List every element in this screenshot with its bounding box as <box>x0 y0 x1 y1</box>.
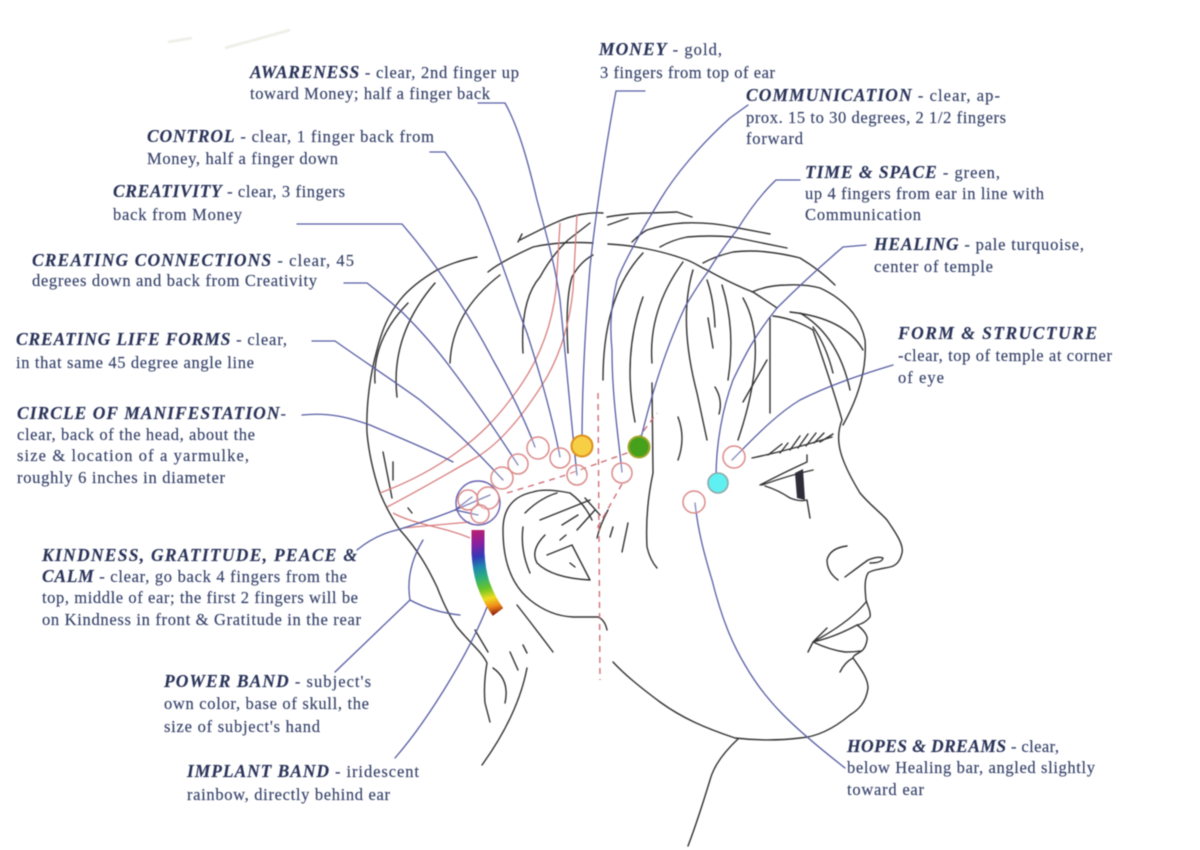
leader: implant band <box>395 607 487 758</box>
creating connections spot <box>508 454 528 474</box>
kindness and gratitude spots <box>458 490 478 510</box>
label: time and space: Communication <box>805 205 921 224</box>
label: control: Money, half a finger down <box>147 149 338 168</box>
label: power band: POWER BAND - subject's <box>163 671 371 691</box>
label: time and space: up 4 fingers from ear in line with <box>805 184 1045 203</box>
leader: form and structure <box>732 365 893 460</box>
label: circle of manifestation: size & location of a yarmulke, <box>17 446 249 465</box>
label: communication: prox. 15 to 30 degrees, 2 1/2 fingers <box>746 108 1006 127</box>
label: implant band: rainbow, directly behind ear <box>187 785 390 804</box>
label: control: CONTROL - clear, 1 finger back from <box>147 126 434 146</box>
leader: communication <box>611 105 748 472</box>
leader: money <box>582 91 645 443</box>
label: creativity: CREATIVITY - clear, 3 fingers <box>113 181 345 201</box>
leader: circle of manifestation <box>302 414 453 462</box>
nose and mouth <box>808 546 883 672</box>
leader: creativity <box>297 224 535 447</box>
hopes and dreams spot <box>683 491 705 513</box>
neck <box>688 739 738 846</box>
money gold spot <box>572 436 592 456</box>
label: money: MONEY - gold, <box>598 39 722 59</box>
label: circle of manifestation: roughly 6 inches in diameter <box>17 468 226 487</box>
leader: kindness <box>357 495 490 550</box>
label: hopes and dreams: HOPES & DREAMS - clear, <box>846 736 1059 756</box>
circle of manifestation <box>456 481 500 525</box>
label: kindness, gratitude, peace and calm: KINDNESS, GRATITUDE, PEACE & <box>41 545 357 565</box>
creating life forms spot <box>491 467 513 489</box>
head line drawing <box>367 212 902 846</box>
label: circle of manifestation <box>17 403 286 487</box>
label: form and structure: -clear, top of temple at corner <box>898 346 1112 365</box>
label: time and space: TIME & SPACE - green, <box>805 162 1000 182</box>
hair strands <box>375 212 865 568</box>
label: healing <box>873 234 1084 276</box>
label: power band: size of subject's hand <box>164 717 321 736</box>
leader: power band <box>335 540 460 672</box>
label: creating connections <box>32 250 354 290</box>
label: hopes and dreams: toward ear <box>847 780 924 799</box>
label: healing: center of temple <box>874 257 993 276</box>
label: time and space <box>805 162 1045 224</box>
label: implant band: IMPLANT BAND - iridescent <box>186 761 419 781</box>
leader: creating life forms <box>312 341 503 480</box>
label: creating life forms: CREATING LIFE FORMS - clear, <box>16 329 287 349</box>
label: form and structure <box>897 323 1112 387</box>
form and structure spot <box>723 446 745 468</box>
label: circle of manifestation: clear, back of the head, about the <box>17 425 255 444</box>
label: power band: own color, base of skull, the <box>164 694 369 713</box>
implant band rainbow <box>478 530 498 612</box>
label: communication <box>746 85 1006 148</box>
leader: control <box>430 152 560 457</box>
label: money <box>598 39 776 82</box>
red energy lines <box>380 215 657 680</box>
markers <box>456 436 745 525</box>
label: form and structure: of eye <box>898 368 944 387</box>
face profile <box>613 316 902 740</box>
leader: time and space <box>640 180 800 442</box>
control spot <box>550 448 570 468</box>
label: money: 3 fingers from top of ear <box>600 63 776 82</box>
awareness spot <box>567 465 587 485</box>
leader: awareness <box>478 103 577 475</box>
leader lines <box>297 91 893 768</box>
label: creating connections: degrees down and back from Creativity <box>32 271 318 290</box>
label: creativity: back from Money <box>113 205 243 224</box>
label: power band <box>163 671 371 736</box>
eye <box>760 455 813 518</box>
label: healing: HEALING - pale turquoise, <box>873 234 1084 254</box>
eyebrow <box>752 433 833 458</box>
back of head outline <box>367 213 603 722</box>
leader: healing <box>716 245 866 478</box>
label: communication: forward <box>746 129 804 148</box>
label: hopes and dreams: below Healing bar, angled slightly <box>847 758 1096 777</box>
scan smudge <box>168 30 290 48</box>
leader: creating connections <box>344 283 518 465</box>
label: awareness: toward Money; half a finger back <box>250 84 491 103</box>
communication spot <box>612 463 632 483</box>
label: kindness, gratitude, peace and calm: CALM - clear, go back 4 fingers from the <box>42 566 347 586</box>
label: kindness, gratitude, peace and calm: on Kindness in front & Gratitude in the rear <box>42 610 362 629</box>
label: form and structure: FORM & STRUCTURE <box>897 323 1097 343</box>
label: hopes and dreams <box>846 736 1096 799</box>
leader: hopes and dreams <box>695 503 845 768</box>
label: kindness, gratitude, peace and calm: top, middle of ear; the first 2 fingers will be <box>42 588 358 607</box>
label: creating life forms <box>16 329 287 372</box>
label: communication: COMMUNICATION - clear, ap- <box>746 85 1000 105</box>
ear <box>503 490 628 630</box>
label: creating life forms: in that same 45 degree angle line <box>16 353 254 372</box>
healing turquoise spot <box>708 473 728 493</box>
label: creating connections: CREATING CONNECTIONS - clear, 45 <box>32 250 354 270</box>
label: awareness: AWARENESS - clear, 2nd finger up <box>249 62 519 82</box>
label: kindness, gratitude, peace and calm <box>41 545 362 629</box>
label: circle of manifestation: CIRCLE OF MANIFESTATION- <box>17 403 286 423</box>
label: implant band <box>186 761 419 804</box>
label: creativity <box>113 181 345 224</box>
label: awareness <box>249 62 519 103</box>
creativity spot <box>527 437 549 459</box>
time and space green spot <box>628 436 650 458</box>
neck hair <box>475 605 553 765</box>
label: control <box>147 126 434 168</box>
